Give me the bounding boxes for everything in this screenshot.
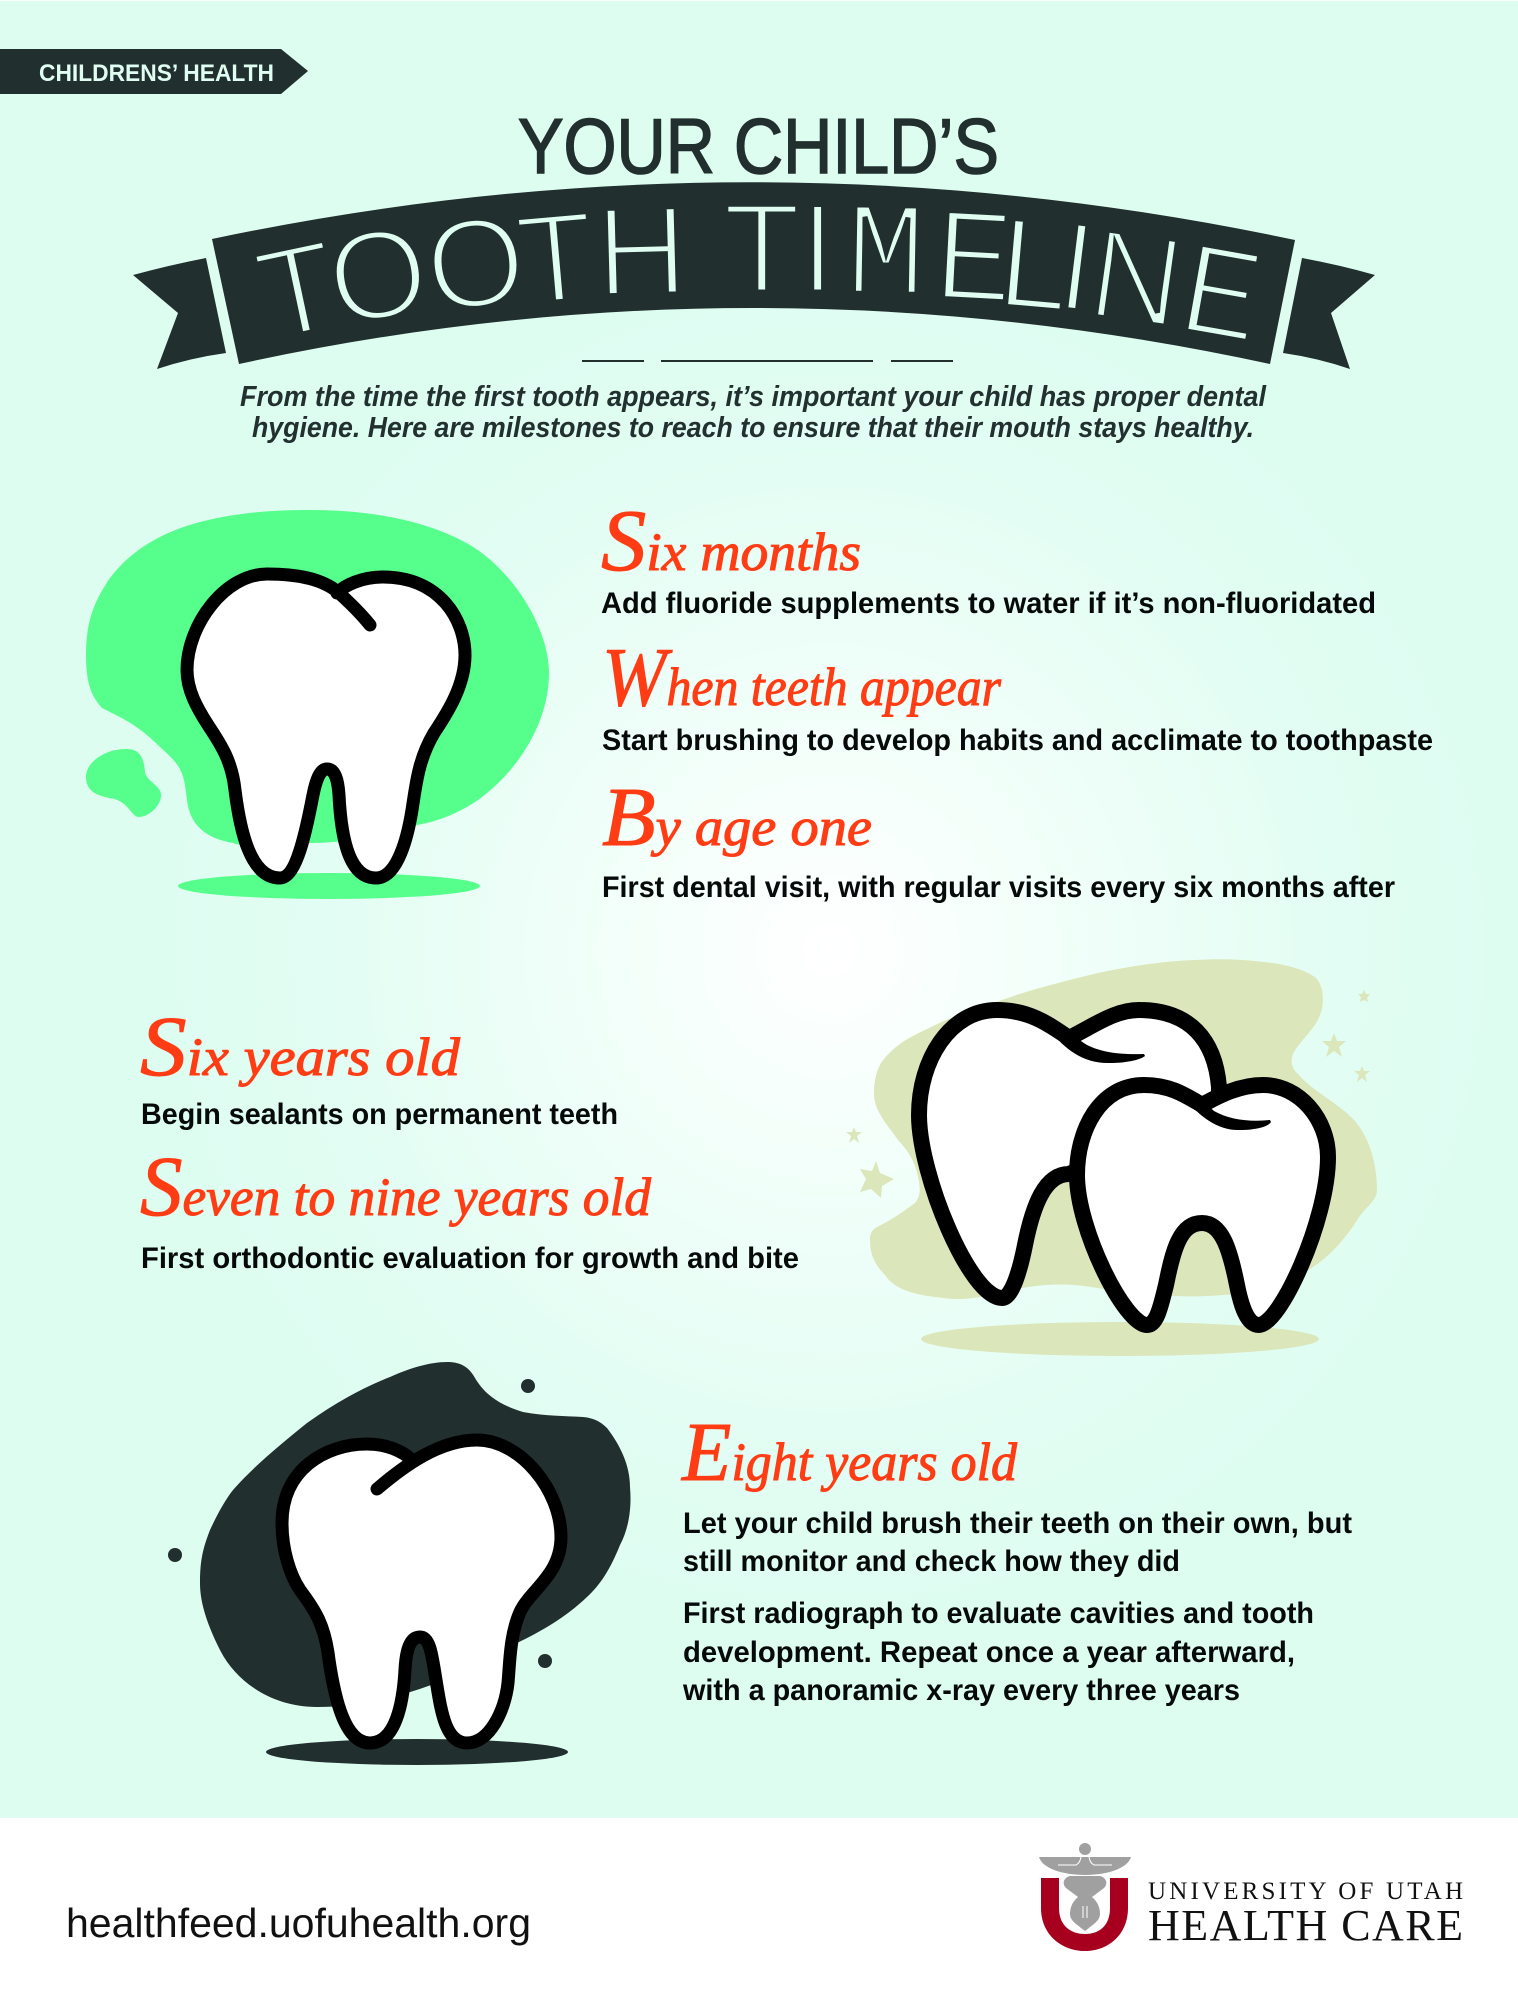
green ground shadow <box>178 873 480 899</box>
milestone: six years old <box>140 998 618 1131</box>
milestone: six years old: Six years old <box>140 998 461 1094</box>
green blob <box>86 510 549 847</box>
intro text <box>240 381 1267 444</box>
logo: university of utah health care: UNIVERSITY OF UTAH <box>1148 1878 1463 1905</box>
icon: back tooth crease <box>1050 1030 1145 1063</box>
milestone: eight years old: Let your child brush their teeth on their own, but <box>683 1507 1352 1540</box>
dots <box>168 1379 552 1668</box>
milestone: when teeth appear <box>602 631 1433 757</box>
logo: university of utah health care <box>1039 1843 1463 1951</box>
milestone: eight years old: First radiograph to evaluate cavities and tooth <box>683 1597 1314 1630</box>
milestone: eight years old: still monitor and check how they did <box>683 1545 1180 1578</box>
intro text: From the time the first tooth appears, it’s important your child has proper dental <box>240 381 1267 413</box>
stars <box>846 990 1370 1198</box>
decorative divider dashes <box>582 360 953 362</box>
milestone: eight years old: Eight years old <box>681 1406 1018 1499</box>
milestones: infancy <box>601 493 1433 904</box>
milestone: seven to nine years old: First orthodontic evaluation for growth and bite <box>141 1242 799 1275</box>
icon: back tooth <box>919 1010 1219 1298</box>
milestone: seven to nine years old <box>140 1138 799 1275</box>
panel: single tooth on dark blob <box>168 1362 631 1765</box>
milestone: six months: Add fluoride supplements to water if it’s non-fluoridated <box>601 587 1376 620</box>
olive blob <box>870 959 1377 1299</box>
intro text: hygiene. Here are milestones to reach to ensure that their mouth stays healthy. <box>252 412 1254 444</box>
milestone: by age one <box>602 771 1395 904</box>
milestone: eight years old <box>681 1406 1352 1707</box>
category badge <box>0 49 308 94</box>
title: your child's: YOUR CHILD’S <box>518 102 999 190</box>
milestone: by age one: By age one <box>602 771 872 864</box>
footer url: healthfeed.uofuhealth.org <box>66 1900 531 1946</box>
milestone: when teeth appear: When teeth appear <box>602 631 1002 724</box>
panel: single tooth on green blob <box>86 510 549 899</box>
milestone: when teeth appear: Start brushing to develop habits and acclimate to toothpaste <box>602 724 1433 757</box>
icon: front tooth <box>1077 1085 1328 1325</box>
logo: university of utah health care: HEALTH CARE <box>1148 1901 1463 1950</box>
milestone: eight years old: with a panoramic x-ray every three years <box>682 1674 1240 1707</box>
small green blob <box>86 749 161 817</box>
olive ground shadow <box>921 1322 1319 1356</box>
milestone: six years old: Begin sealants on permanent teeth <box>141 1098 618 1131</box>
panel: two teeth on olive blob <box>846 959 1377 1356</box>
icon: tooth <box>187 574 465 878</box>
dark ground shadow <box>266 1739 568 1765</box>
milestone: eight years old: development. Repeat once a year afterward, <box>683 1636 1295 1669</box>
dark blob <box>200 1362 631 1707</box>
icon: front tooth crease <box>1185 1098 1271 1130</box>
milestones: childhood <box>140 998 799 1275</box>
milestone: six months: Six months <box>601 493 861 590</box>
ribbon banner with tooth timeline title: TOOTH TIMELINE <box>245 175 1273 383</box>
category badge: CHILDRENS’ HEALTH <box>39 60 274 87</box>
milestone: six months <box>601 493 1376 620</box>
milestone: seven to nine years old: Seven to nine years old <box>140 1138 652 1234</box>
icon: tooth <box>282 1440 561 1743</box>
footer panel <box>0 1818 1518 1998</box>
milestone: by age one: First dental visit, with regular visits every six months after <box>602 871 1395 904</box>
